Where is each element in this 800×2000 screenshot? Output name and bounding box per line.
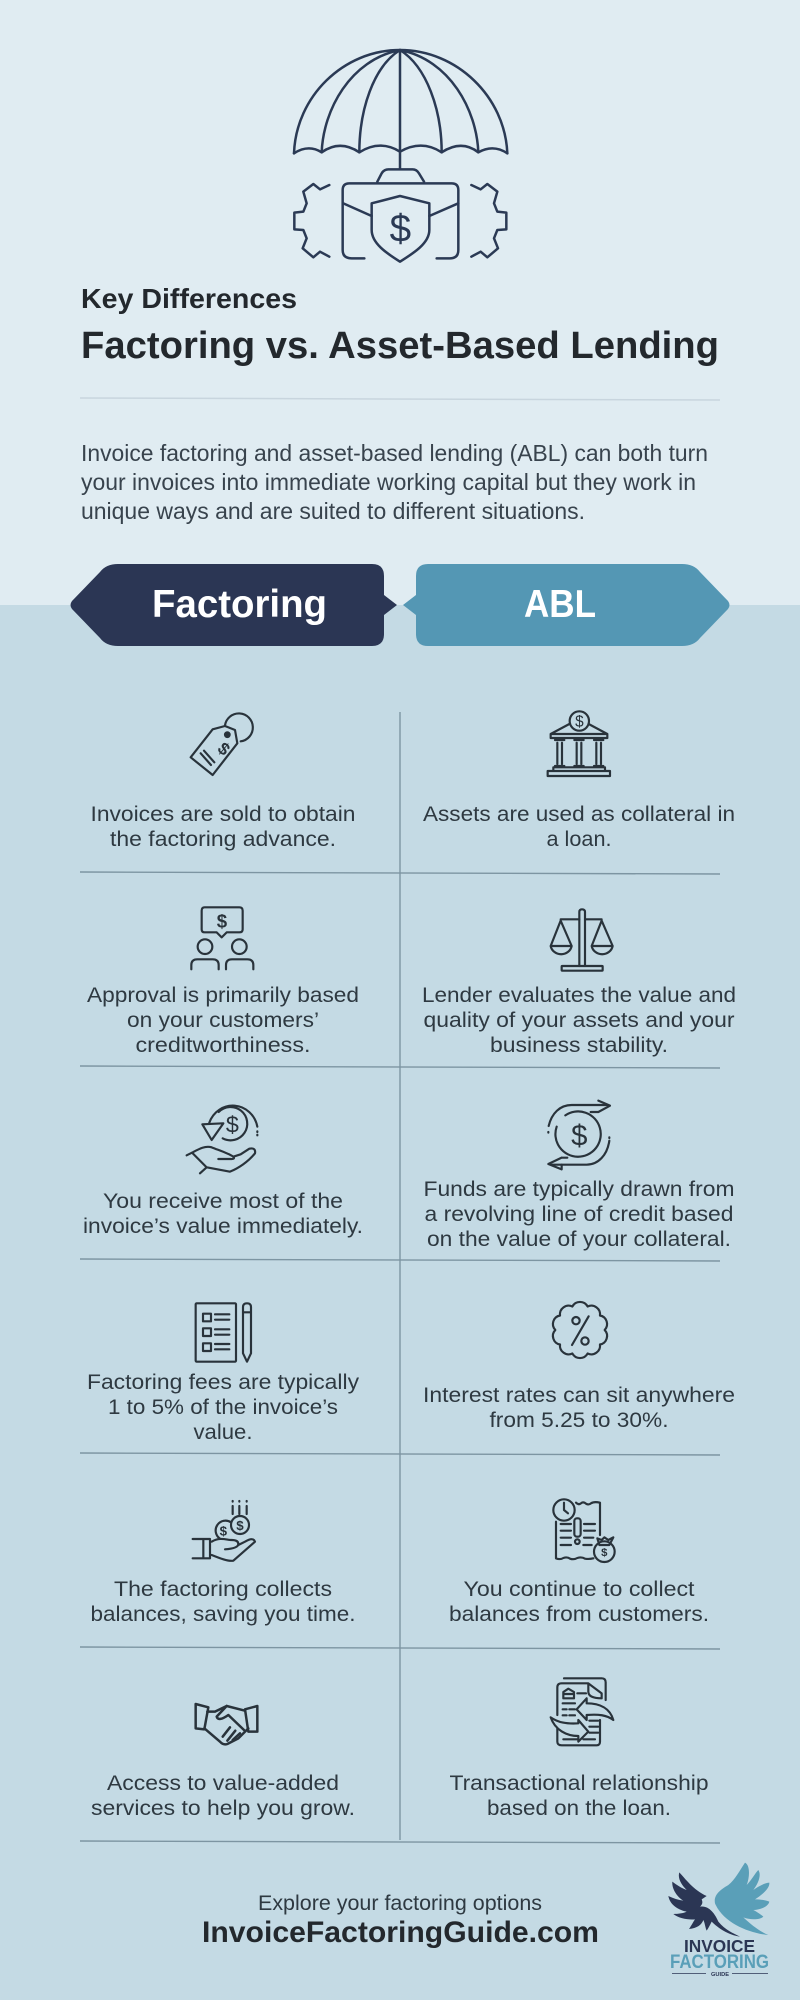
icon: receipt, clock and money bag — [553, 1499, 615, 1562]
icon: bank: $ — [575, 714, 584, 731]
logo wings — [668, 1863, 769, 1937]
text: revolving funds: Funds are typically drawn from — [424, 1176, 734, 1201]
divider — [80, 398, 720, 400]
icon: handshake — [196, 1704, 257, 1744]
icon: hand with coins — [193, 1501, 255, 1561]
icon: two people and speech bubble: $ — [217, 910, 228, 931]
text: factoring fees: Factoring fees are typically — [87, 1369, 359, 1394]
text: invoices sold: the factoring advance. — [110, 826, 336, 851]
icon: percent badge — [553, 1302, 607, 1358]
banner: ABL: ABL — [524, 583, 596, 626]
text: invoices sold — [90, 801, 356, 851]
icon: hand with returning coin: $ — [226, 1111, 239, 1137]
text: factoring collects — [90, 1576, 356, 1626]
text: continue to collect: balances from customers. — [449, 1601, 709, 1626]
row 4 — [87, 1302, 735, 1444]
intro paragraph — [81, 440, 708, 524]
intro paragraph: unique ways and are suited to different situations. — [81, 498, 585, 524]
text: assets collateral: a loan. — [546, 826, 612, 851]
footer call to action: InvoiceFactoringGuide.com — [202, 1916, 599, 1949]
text: revolving funds: on the value of your collateral. — [427, 1226, 731, 1251]
text: value-added services: Access to value-added — [107, 1770, 339, 1795]
text: approval: creditworthiness. — [136, 1032, 310, 1057]
icon: receipt, clock and money bag: $ — [601, 1547, 608, 1559]
icon: hand with coins: $ — [236, 1518, 244, 1533]
text: factoring collects: The factoring collects — [114, 1576, 332, 1601]
row 1 — [90, 711, 735, 851]
row 6 — [91, 1678, 708, 1820]
text: value-added services — [91, 1770, 355, 1820]
icon: bank — [548, 711, 610, 776]
text: factoring fees: 1 to 5% of the invoice’s — [108, 1394, 338, 1419]
bottom background panel — [0, 605, 800, 2000]
text: receive value: You receive most of the — [103, 1188, 343, 1213]
text: revolving funds — [424, 1176, 734, 1251]
text: transactional relationship: Transactional relationship — [450, 1770, 708, 1795]
title: Factoring vs. Asset-Based Lending — [81, 325, 719, 367]
footer call to action — [202, 1892, 599, 1949]
intro paragraph: Invoice factoring and asset-based lending (ABL) can both turn — [81, 440, 708, 466]
text: receive value: invoice’s value immediately. — [83, 1213, 363, 1238]
text: approval — [87, 982, 359, 1057]
text: approval: Approval is primarily based — [87, 982, 359, 1007]
text: continue to collect: You continue to collect — [464, 1576, 694, 1601]
icon: checklist and pencil — [196, 1303, 251, 1362]
icon: umbrella over briefcase — [294, 50, 507, 262]
text: interest rates — [423, 1382, 735, 1432]
text: assets collateral — [423, 801, 735, 851]
icon: umbrella over briefcase: $ — [390, 207, 411, 250]
text: continue to collect — [449, 1576, 709, 1626]
icon: circular dollar arrows: $ — [571, 1119, 587, 1152]
text: revolving funds: a revolving line of credit based — [424, 1201, 734, 1226]
icon: scales — [551, 909, 613, 971]
text: lender evaluates — [422, 982, 736, 1057]
banner: Factoring: Factoring — [152, 583, 327, 626]
logo: Invoice Factoring Guide: GUIDE — [711, 1972, 729, 1978]
text: factoring fees — [87, 1369, 359, 1444]
text: receive value — [83, 1188, 363, 1238]
icon: price tag: $ — [214, 738, 234, 760]
row 5 — [90, 1499, 709, 1626]
banner: Factoring — [70, 564, 397, 646]
text: lender evaluates: quality of your assets and your — [424, 1007, 734, 1032]
intro paragraph: your invoices into immediate working capital but they work in — [81, 469, 696, 495]
text: invoices sold: Invoices are sold to obtain — [90, 801, 356, 826]
icon: hand with coins: $ — [220, 1523, 228, 1538]
banner: ABL — [403, 564, 730, 646]
text: lender evaluates: Lender evaluates the value and — [422, 982, 736, 1007]
row 2 — [87, 907, 736, 1057]
icon: price tag — [191, 713, 253, 775]
logo: Invoice Factoring Guide — [668, 1863, 769, 1978]
logo: Invoice Factoring Guide: INVOICE — [684, 1936, 755, 1956]
top background panel — [0, 0, 800, 605]
text: transactional relationship: based on the loan. — [487, 1795, 671, 1820]
icon: circular dollar arrows — [548, 1101, 610, 1169]
text: interest rates: Interest rates can sit anywhere — [423, 1382, 735, 1407]
text: assets collateral: Assets are used as collateral in — [423, 801, 735, 826]
text: approval: on your customers’ — [127, 1007, 319, 1032]
text: transactional relationship — [450, 1770, 708, 1820]
text: lender evaluates: business stability. — [490, 1032, 668, 1057]
text: factoring fees: value. — [194, 1419, 252, 1444]
icon: hand with returning coin — [187, 1106, 257, 1173]
comparison grid lines — [80, 712, 720, 1843]
icon: document exchange — [551, 1678, 613, 1745]
text: value-added services: services to help you grow. — [91, 1795, 355, 1820]
icon: two people and speech bubble — [191, 907, 253, 969]
logo: Invoice Factoring Guide: FACTORING — [670, 1952, 769, 1973]
footer call to action: Explore your factoring options — [258, 1892, 542, 1915]
heading: key differences: Key Differences — [81, 283, 297, 314]
text: interest rates: from 5.25 to 30%. — [490, 1407, 668, 1432]
row 3 — [83, 1101, 734, 1251]
text: factoring collects: balances, saving you time. — [90, 1601, 356, 1626]
